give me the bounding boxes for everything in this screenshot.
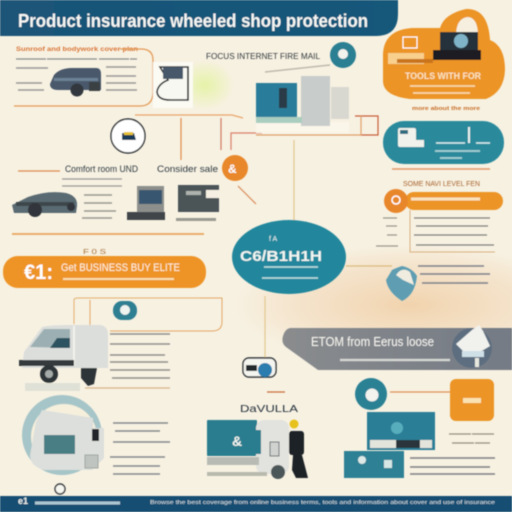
panel: orange camera card: TOOLS WITH FOR [405,71,481,81]
central teal ellipse: C6/B1H1H [240,248,322,265]
header banner [0,0,398,36]
orange banner: €1: [24,261,53,284]
subheadings: Comfort room UND [65,164,138,174]
panel: car and laptops: F 0 S [83,249,106,256]
title: Product insurance wheeled shop protection [18,11,368,31]
panel: orange list [376,189,503,252]
teal box [344,451,404,478]
subheadings: Consider sale [157,164,218,174]
panel: van and person: DaVULLA [240,404,298,415]
footer: e1 [18,496,28,506]
panel: bottom-right [344,378,495,478]
icon: machine [176,185,219,221]
panel: round device [22,395,170,494]
icon: teal circle top [330,42,356,68]
panel: top-left car [14,46,153,106]
teal screen [367,412,435,450]
footer: Browse the best coverage from online business terms, tools and information about cover and use of insurance [150,500,495,506]
panel: truck [19,298,222,391]
icon: person [289,420,308,478]
orange banner [3,256,206,288]
panel: car and laptops [12,179,219,256]
panel: gray banner: ETOM from Eerus loose [311,334,434,349]
panel: van and person [207,392,308,479]
subheadings [18,164,218,174]
central teal ellipse [232,220,346,294]
footer [0,496,512,512]
orange tile [450,379,494,421]
bottom center icon: device [243,358,276,377]
panel: globe with text [386,266,490,301]
icon: side car [12,192,77,217]
truck illustration [19,325,108,391]
icon: circle badge [111,119,145,153]
icon: laptop [127,186,165,220]
orange banner: Get BUSINESS BUY ELITE [61,262,180,274]
heading: right column: SOME NAVI LEVEL FEN [403,181,480,188]
icon: camera [433,32,481,60]
connector lines [135,115,392,358]
icon: teal clock [355,378,387,410]
panel heading: Sunroof and bodywork cover plan [16,46,138,53]
caption: more about the more [412,106,480,112]
icon: figure [452,325,492,368]
icon: car [50,68,101,96]
panel: gray banner [282,325,512,370]
panel: van and person: & [232,433,242,449]
icon: small lens [55,484,65,494]
panel: teal pill [383,121,504,169]
icon: orange circle [222,155,248,181]
printer illustration [256,65,361,135]
heading: center printer: FOCUS INTERNET FIRE MAIL [206,52,321,61]
icon: appliance [398,128,424,147]
icon: bag [153,62,193,108]
icon: orange circle: & [228,162,237,176]
central teal ellipse: f A [269,236,278,243]
icon: teal badge [113,301,137,320]
panel: orange camera card [383,9,505,112]
